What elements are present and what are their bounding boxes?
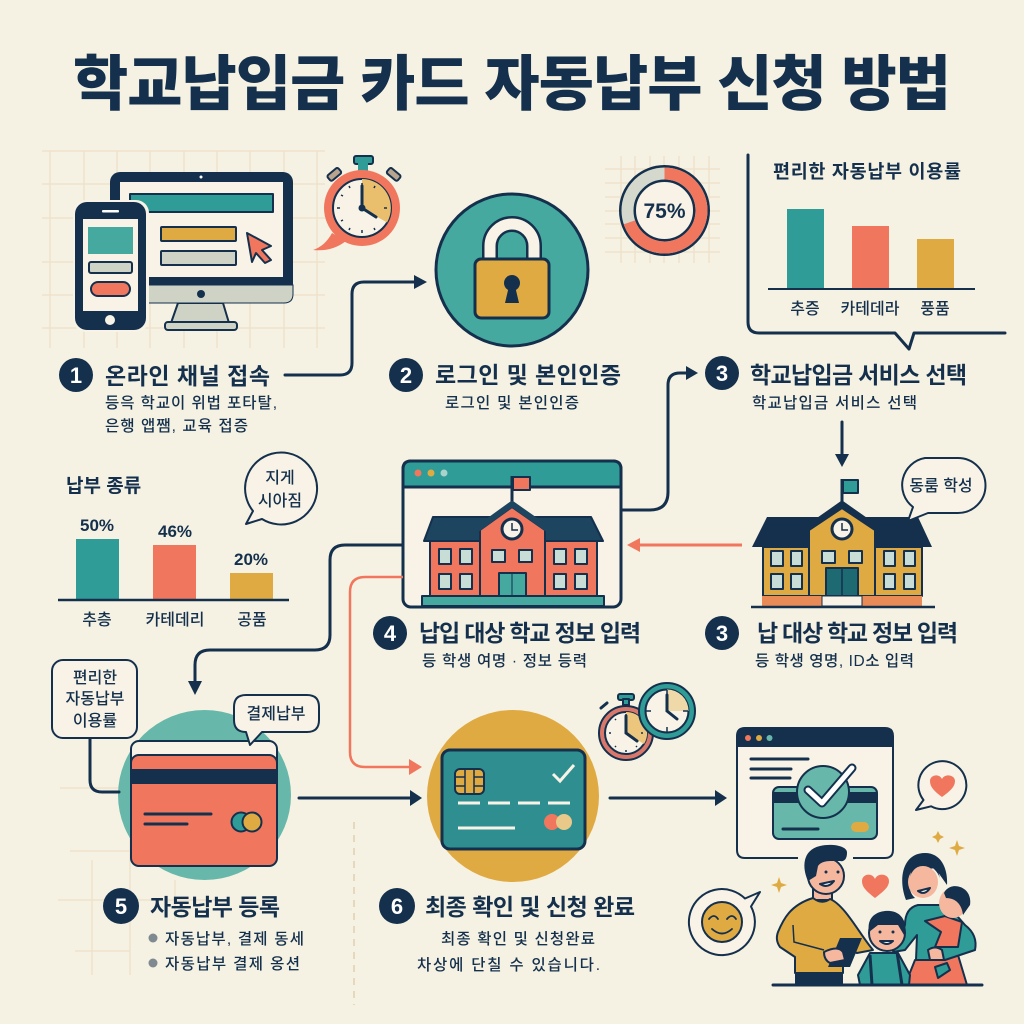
icon: stopwatches — [599, 683, 695, 760]
arrow: school window to step 6 — [350, 577, 422, 775]
icon: monitor and phone — [73, 172, 293, 332]
step 6 heading — [379, 888, 635, 924]
callout: 동룸 학성: 동룸 학성 — [909, 477, 973, 495]
chart: 편리한 자동납부 이용률 — [748, 155, 1005, 349]
panel: confirmation window — [737, 728, 893, 858]
step 6 heading: 6 — [391, 894, 403, 919]
callout: 편리한 자동납부 이용률: 자동납부 — [66, 690, 124, 708]
step 2 heading: 2 — [400, 363, 412, 388]
mother and baby — [893, 853, 976, 985]
step 5 bullet list — [148, 930, 304, 973]
step 4 heading — [373, 616, 641, 650]
step 3b heading — [705, 616, 958, 650]
step 1 description line 2: 은행 앱쨈, 교육 접증 — [105, 417, 248, 435]
step 5 heading: 자동납부 등록 — [150, 894, 280, 920]
bars — [76, 539, 273, 599]
monitor — [110, 172, 293, 330]
bar labels: 추층 — [82, 611, 112, 629]
icon: gold school — [751, 479, 935, 607]
step 6 description: 최종 확인 및 신청완료 — [441, 930, 595, 948]
callout: 편리한 자동납부 이용률: 이용률 — [73, 712, 117, 730]
icon: sparkles — [771, 831, 965, 893]
arrow: school window to step 5 — [188, 545, 403, 695]
callout: 지게 시아짐: 지게 — [265, 469, 295, 487]
callout: 동룸 학성 — [902, 458, 985, 521]
arrow: to step 3 — [621, 366, 698, 510]
callout: 지게 시아짐: 시아짐 — [258, 492, 302, 510]
boy — [858, 911, 910, 985]
chart title: 납부 종류 — [66, 475, 141, 497]
icon: teal card in gold circle — [427, 710, 599, 882]
icon: heart — [862, 875, 889, 898]
bar values: 46% — [158, 522, 192, 541]
callout: 편리한 자동납부 이용률: 편리한 — [73, 669, 117, 687]
step 4 heading: 납입 대상 학교 정보 입력 — [419, 620, 641, 646]
icon: stopwatch speech bubble — [313, 156, 401, 250]
illustration: family — [773, 845, 982, 985]
step 3 heading: 3 — [716, 361, 728, 386]
chart: 75% donut — [628, 174, 702, 248]
callout: smile bubble — [689, 889, 760, 955]
arrow: step 1 to step 2 — [285, 275, 427, 375]
father — [777, 845, 873, 985]
step 3 heading — [705, 356, 967, 390]
icon: padlock in circle — [436, 194, 588, 346]
bar labels — [790, 300, 950, 318]
step 2 heading: 로그인 및 본인인증 — [435, 362, 621, 388]
bar values: 20% — [234, 550, 268, 569]
step 1 description: 등윽 학교이 위법 포타탈, — [105, 394, 277, 412]
bars — [787, 209, 954, 288]
arrow: step 6 to confirmation — [610, 790, 727, 806]
step 3b heading: 3 — [716, 621, 728, 646]
step 3b heading: 납 대상 학교 정보 입력 — [757, 620, 958, 646]
icon: coral school — [422, 476, 604, 606]
arrow: coral back to school window — [627, 538, 742, 552]
step 6 heading: 최종 확인 및 신청 완료 — [425, 894, 635, 920]
step 6 description — [417, 930, 600, 974]
callout: 편리한 자동납부 이용률 — [52, 660, 137, 792]
bar labels — [82, 611, 267, 629]
step 5 bullet list: 자동납부, 결제 동세 — [165, 930, 304, 948]
step 2 heading — [389, 358, 621, 392]
step 6 description: 차상에 단칠 수 있습니다. — [417, 956, 600, 974]
chart: 75% donut: 75% — [643, 200, 686, 223]
panel: school in browser window — [403, 461, 621, 607]
step 4 heading: 4 — [384, 621, 397, 646]
step 1 heading: 1 — [70, 363, 82, 388]
phone — [73, 200, 149, 332]
ground line — [773, 984, 982, 986]
step 3 description: 학교납입금 서비스 선택 — [752, 394, 917, 412]
bar values: 50% — [80, 516, 114, 535]
arrow: step 5 to step 6 — [299, 790, 422, 806]
bar values — [80, 516, 268, 569]
step 1 heading — [59, 358, 270, 392]
step 5 bullet list: 자동납부 결제 옹션 — [165, 955, 300, 973]
callout: 지게 시아짐 — [245, 452, 317, 524]
step 3 heading: 학교납입금 서비스 선택 — [750, 362, 967, 388]
callout: 결제납부 — [234, 695, 319, 745]
chart: 납부 종류 — [58, 475, 289, 629]
arrow: step 3 down to school — [835, 422, 849, 467]
step 1 heading: 온라인 채널 접속 — [105, 363, 270, 389]
step 2 description: 로그인 및 본인인증 — [445, 394, 579, 412]
chart title: 편리한 자동납부 이용률 — [773, 161, 961, 182]
step 3b description: 등 학생 영명, ID소 입력 — [755, 652, 914, 670]
icon: card with check — [773, 766, 877, 839]
step 4 description: 등 학생 여명 · 정보 등력 — [422, 652, 587, 670]
icon: coral card in teal circle — [118, 710, 291, 880]
callout: 결제납부: 결제납부 — [247, 705, 305, 723]
step 5 heading: 5 — [115, 894, 127, 919]
bar labels: 공품 — [237, 612, 267, 629]
callout: heart bubble — [916, 761, 966, 810]
bar labels: 카테데리 — [146, 611, 204, 629]
bar labels: 카테데라 — [841, 300, 900, 318]
title: 학교납입금 카드 자동납부 신청 방법 — [73, 51, 951, 118]
bar labels: 풍품 — [920, 301, 950, 318]
bar labels: 추증 — [790, 300, 820, 318]
step 5 heading — [103, 888, 280, 924]
